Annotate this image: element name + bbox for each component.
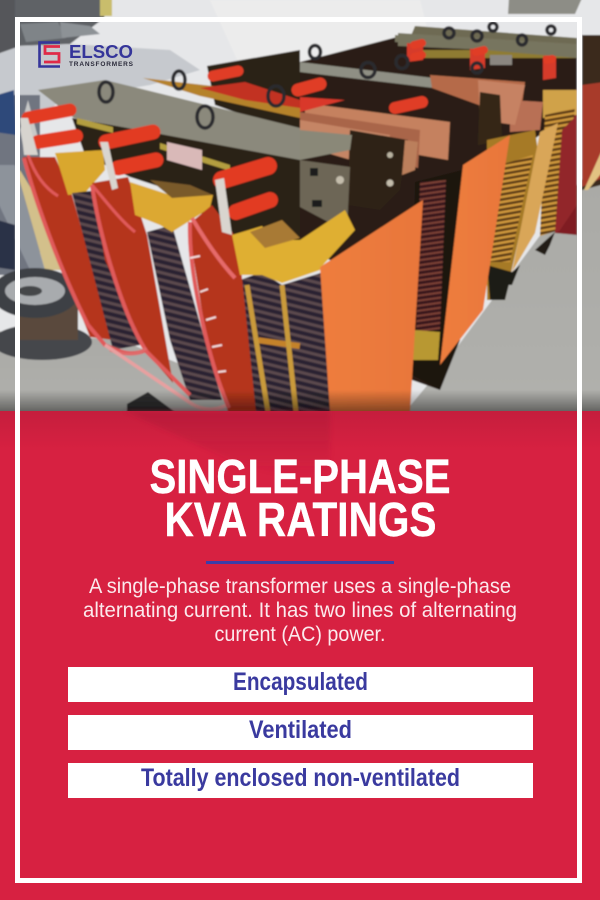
left transformer bbox=[20, 100, 146, 353]
title: KVA RATINGS bbox=[164, 494, 436, 547]
rails behind first beam bbox=[143, 50, 300, 135]
second orange panel bbox=[440, 135, 510, 365]
list item: Totally enclosed non-ventilated bbox=[68, 763, 533, 798]
background photo: transformers in workshop bbox=[0, 0, 600, 412]
description text: current (AC) power. bbox=[214, 623, 386, 646]
icon: ELSCO mark bbox=[40, 42, 60, 66]
shadow at base of photo bbox=[0, 390, 600, 412]
logo wordmark: ELSCO bbox=[69, 42, 133, 62]
rear transformers bbox=[398, 26, 577, 255]
title bbox=[150, 451, 450, 547]
wire spool bbox=[0, 268, 92, 360]
second coil bbox=[412, 170, 462, 390]
central steel block bbox=[300, 130, 418, 232]
front transformer bbox=[188, 166, 335, 412]
list item: Totally enclosed non-ventilated: Totally enclosed non-ventilated bbox=[141, 764, 460, 792]
list item: Ventilated: Ventilated bbox=[249, 716, 352, 744]
logo bbox=[40, 42, 134, 68]
bottom pink cable bbox=[105, 345, 230, 409]
list item: Ventilated bbox=[68, 715, 533, 750]
list item: Encapsulated: Encapsulated bbox=[233, 668, 368, 696]
machinery top left bbox=[0, 0, 112, 70]
yellow winding tabs near main panel bbox=[300, 210, 355, 270]
third coil and tan panel bbox=[487, 123, 558, 300]
floor bbox=[0, 330, 300, 412]
beyond frame right bbox=[582, 35, 600, 190]
dark frame under beam bbox=[72, 118, 300, 245]
divider bbox=[206, 561, 394, 564]
title: SINGLE-PHASE bbox=[150, 451, 450, 504]
shelving left bbox=[0, 90, 62, 275]
red lower panel bbox=[0, 411, 600, 900]
description text: alternating current. It has two lines of alternating bbox=[83, 599, 517, 622]
steel top beam bbox=[38, 80, 300, 171]
logo subtitle: TRANSFORMERS bbox=[69, 61, 134, 68]
rear insulators bbox=[213, 43, 552, 108]
middle transformer bbox=[92, 132, 222, 400]
plastic sheet bbox=[0, 44, 200, 130]
base plate bbox=[127, 392, 175, 412]
list item: Encapsulated bbox=[68, 667, 533, 702]
main orange panel bbox=[320, 200, 423, 412]
second beam and copper bbox=[300, 35, 577, 145]
dark core behind rear transformers bbox=[300, 37, 577, 390]
description text: A single-phase transformer uses a single-phase bbox=[89, 575, 511, 598]
description text bbox=[83, 575, 517, 646]
copper bus bars bbox=[300, 97, 450, 170]
eye bolts bbox=[99, 23, 555, 128]
faded photo reflection bbox=[0, 411, 600, 480]
